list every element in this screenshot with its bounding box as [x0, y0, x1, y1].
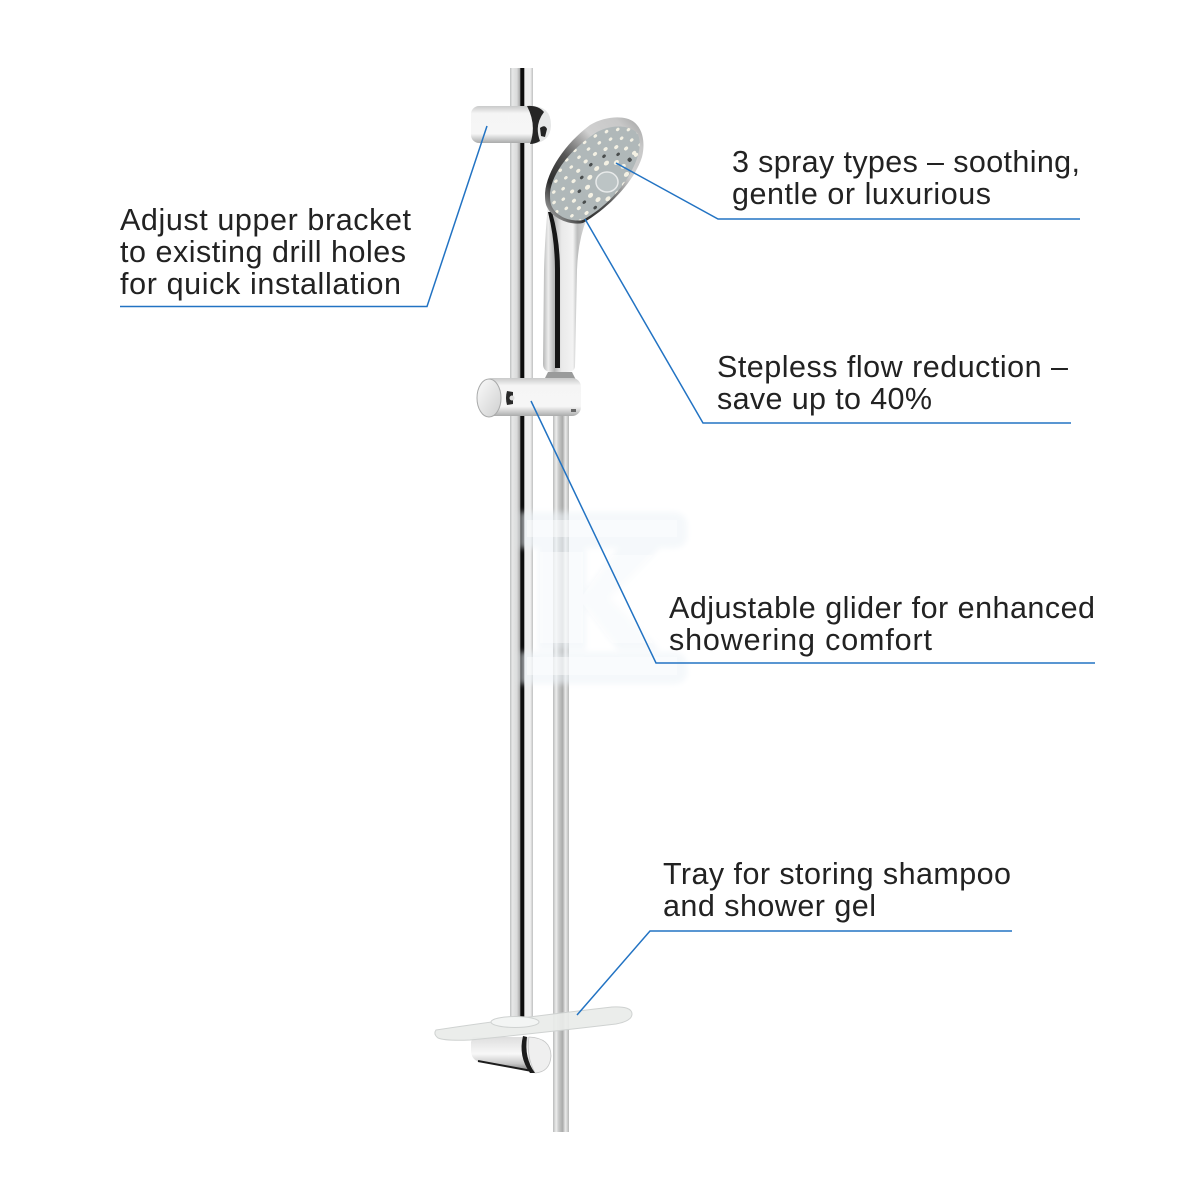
callout: flow reduction: [585, 219, 1071, 423]
tray plate: [435, 1007, 632, 1040]
label: to existing drill holes: [120, 235, 406, 269]
shampoo tray: [435, 1007, 632, 1040]
label: save up to 40%: [717, 382, 932, 416]
leader line: [120, 126, 487, 306]
leader line: [577, 931, 1012, 1015]
handle dark reflection: [548, 212, 560, 368]
label: Tray for storing shampoo: [663, 857, 1011, 891]
shower set product: [434, 68, 644, 1132]
head rim: [545, 117, 643, 224]
rail collar: [491, 1016, 539, 1028]
logo halo: [520, 512, 687, 684]
hose: [553, 414, 569, 1132]
upper bracket: [471, 106, 551, 144]
spray nozzles: [552, 128, 640, 220]
callout: tray: [577, 857, 1012, 1015]
leader line: [531, 401, 1095, 663]
handle neck: [544, 372, 576, 380]
glider: [477, 378, 581, 417]
handle: [543, 205, 587, 372]
logo shapes: [527, 520, 677, 675]
leader line: [585, 219, 1071, 423]
label: Stepless flow reduction –: [717, 350, 1068, 384]
spray face: [550, 126, 640, 220]
callout: upper bracket: [120, 126, 487, 306]
label: Adjust upper bracket: [120, 203, 412, 237]
hand shower: [520, 96, 694, 380]
watermark: faint K logo: [520, 512, 687, 684]
label: for quick installation: [120, 267, 401, 301]
callout: spray types: [616, 145, 1080, 219]
lower bracket: [471, 1036, 551, 1073]
label: and shower gel: [663, 889, 876, 923]
label: 3 spray types – soothing,: [732, 145, 1080, 179]
leader line: [616, 163, 1080, 219]
centre button: [596, 172, 618, 192]
shower rail: [510, 68, 533, 1024]
callout: glider: [531, 401, 1095, 663]
label: gentle or luxurious: [732, 177, 991, 211]
label: Adjustable glider for enhanced: [669, 591, 1095, 625]
label: showering comfort: [669, 623, 933, 657]
